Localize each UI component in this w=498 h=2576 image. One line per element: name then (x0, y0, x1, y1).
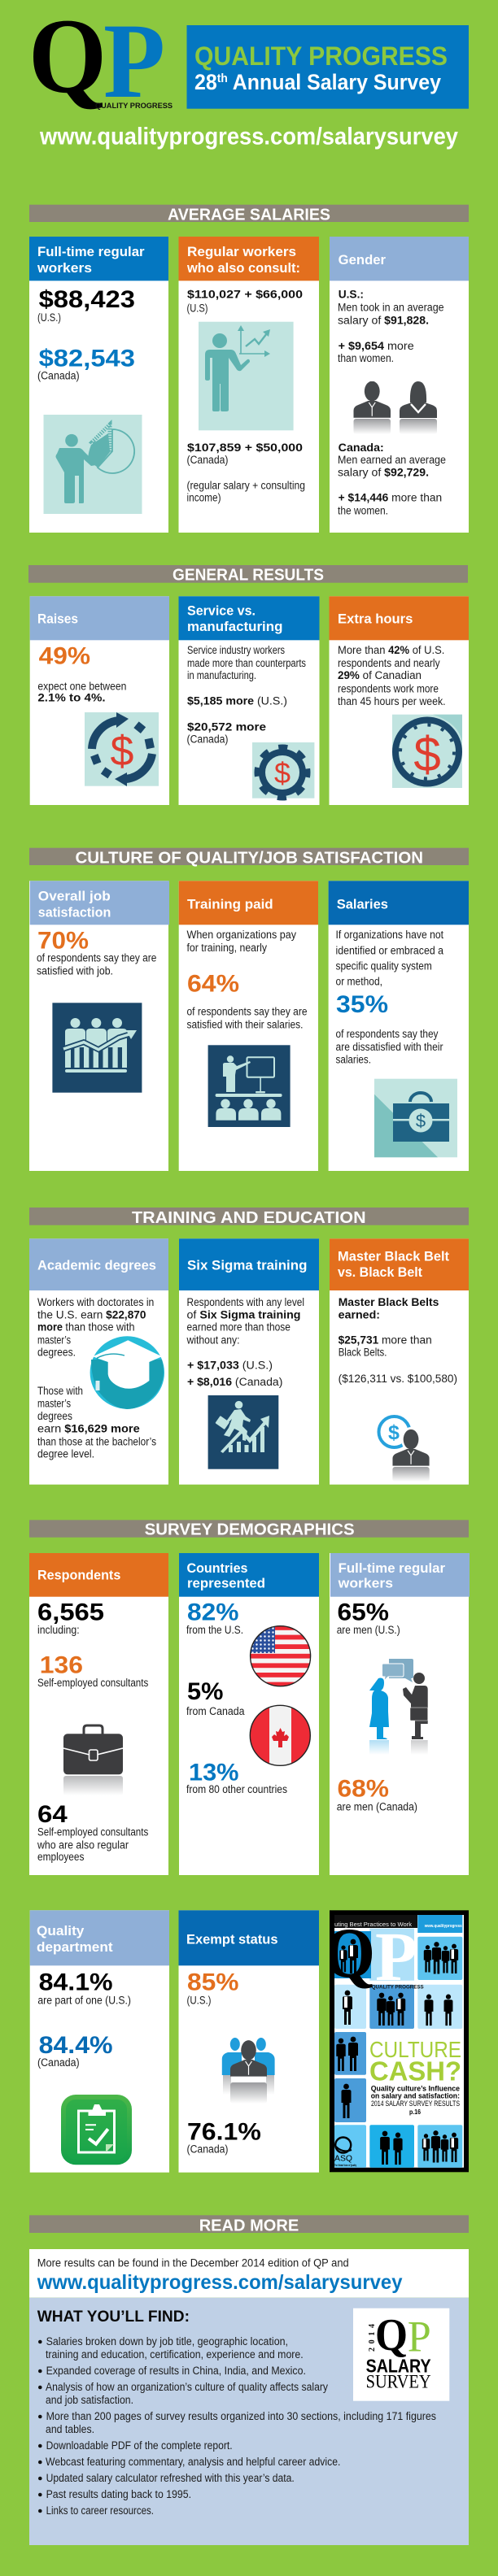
panel: gender: Men earned an average (338, 454, 446, 466)
panel: academic degrees: more than those with (37, 1321, 135, 1334)
logo: 2014 QP salary survey: 2014 (368, 2324, 377, 2352)
panel: gender: U.S.: (339, 288, 364, 301)
icon: dollar in gear (252, 742, 314, 798)
icon: man with dollar coin: $ (388, 1421, 400, 1444)
panel: countries represented: Countries (187, 1561, 247, 1576)
icon: briefcase (63, 1725, 123, 1795)
panel: full-time regular workers demographics: 68% (337, 1775, 389, 1802)
panel: gender: Gender (339, 253, 387, 268)
panel: full-time regular workers demographics: workers (338, 1577, 393, 1591)
panel: academic degrees (29, 1238, 168, 1485)
panel: overall job satisfaction: satisfaction (38, 905, 111, 920)
panel: master black belt vs black belt: Black Belts. (339, 1346, 387, 1358)
panel: gender (330, 237, 469, 533)
icon: dollar in gear: $ (274, 756, 290, 790)
bullet list: Webcast featuring commentary, analysis and helpful career advice. (46, 2456, 340, 2468)
panel: salaries: If organizations have not (335, 929, 443, 941)
panel: countries represented: represented (187, 1577, 265, 1591)
icon: two people talking (369, 1659, 428, 1755)
panel: exempt status: (U.S.) (187, 1994, 212, 2006)
panel: overall job satisfaction: Overall job (38, 889, 111, 903)
heading: training and education (29, 1208, 469, 1227)
panel: countries represented: 13% (189, 1759, 239, 1786)
panel: six sigma training: + $8,016 (Canada) (187, 1376, 282, 1388)
panel: extra hours: respondents and nearly (338, 657, 440, 669)
title box: Annual Salary Survey (228, 70, 441, 94)
panel: gender: salary of $92,729. (338, 467, 429, 479)
panel: master black belt vs black belt: Master Black Belt (338, 1250, 449, 1264)
icon: dollar in cycle arrows (85, 712, 159, 786)
panel: service vs manufacturing: Service vs. (187, 604, 256, 619)
panel: academic degrees: Those with (37, 1385, 83, 1397)
panel: gender: + $14,446 more than (339, 492, 442, 504)
icon: money briefcase: $ (416, 1111, 426, 1131)
panel: gender: the women. (338, 505, 388, 517)
logo: QP Quality Progress: P (103, 1, 165, 120)
logo: 2014 QP salary survey: P (408, 2313, 431, 2361)
panel: raises: expect one between (37, 680, 126, 692)
panel: full-time regular workers: $82,543 (39, 346, 135, 372)
icon: dollar in cycle arrows: $ (111, 728, 134, 775)
bullet list: More than 200 pages of survey results organized into 30 sections, including 171 figures (46, 2410, 436, 2422)
panel: respondents: Respondents (37, 1569, 120, 1583)
panel: overall job satisfaction (29, 881, 169, 1171)
heading: read more: READ MORE (199, 2216, 299, 2234)
panel: quality department: (Canada) (37, 2056, 80, 2069)
icon: dollar clock (392, 715, 462, 788)
panel: salaries: salaries. (335, 1053, 371, 1065)
panel: gender: + $9,654 more (339, 340, 414, 352)
panel: quality department: are part of one (U.S.) (37, 1994, 131, 2006)
panel: salaries: of respondents say they (335, 1028, 439, 1040)
panel: quality department: department (37, 1940, 113, 1955)
panel: raises: 49% (39, 643, 90, 670)
panel: gender: Men took in an average (338, 302, 444, 314)
panel: master black belt vs black belt: earned: (339, 1308, 380, 1321)
heading: read more (29, 2215, 469, 2234)
panel: master black belt vs black belt: $25,731 more than (339, 1334, 432, 1347)
heading: general results (28, 565, 468, 584)
logo: 2014 QP salary survey (353, 2308, 449, 2401)
logo: 2014 QP salary survey: SALARY (366, 2355, 431, 2376)
cover: QP masthead: P (375, 1917, 417, 1995)
panel: extra hours: More than 42% of U.S. (338, 644, 444, 656)
panel: full-time regular workers demographics: 65% (337, 1599, 389, 1626)
icon: man and woman (353, 381, 437, 434)
panel: regular workers who also consult: (U.S) (187, 302, 208, 314)
panel: salaries (329, 881, 469, 1171)
cover: headline: p.16 (409, 2108, 421, 2116)
cover: silhouettes (336, 1939, 458, 2165)
icon: man climbing chart (208, 1395, 278, 1469)
panel: respondents: employees (37, 1851, 85, 1863)
panel: exempt status: 85% (187, 1969, 239, 1996)
bullet list (38, 2335, 436, 2517)
icon: group of people (222, 2034, 275, 2104)
panel: extra hours (329, 596, 469, 805)
panel: exempt status: Exempt status (186, 1933, 278, 1947)
panel: quality department: 84.1% (39, 1969, 113, 1996)
panel: raises (30, 596, 169, 805)
panel: academic degrees: Workers with doctorates in (37, 1296, 154, 1308)
icon: presenter with pie chart (44, 415, 142, 514)
panel: gender: than women. (338, 352, 394, 364)
panel: respondents: 136 (40, 1651, 83, 1678)
panel: more results link (29, 2249, 469, 2298)
magazine cover (324, 1910, 469, 2172)
bullet list: Salaries broken down by job title, geographic location, (46, 2335, 288, 2348)
panel: six sigma training: without any: (186, 1334, 239, 1347)
panel: full-time regular workers demographics (330, 1553, 470, 1875)
cover: top strip: uting Best Practices to Work (334, 1921, 412, 1928)
panel: extra hours: than 45 hours per week. (338, 695, 446, 707)
panel: training paid (179, 881, 318, 1171)
cover: QP masthead: QUALITY PROGRESS (372, 1985, 424, 1991)
panel: full-time regular workers demographics: Full-time regular (339, 1561, 446, 1576)
panel: regular workers who also consult: income) (187, 492, 221, 504)
panel: regular workers who also consult: $107,859 + $50,000 (187, 441, 303, 454)
panel: respondents: 6,565 (37, 1599, 104, 1626)
panel: six sigma training: earned more than those (187, 1321, 290, 1334)
panel: service vs manufacturing: Service industry workers (187, 644, 285, 656)
cover: headline: on salary and satisfaction: (371, 2092, 460, 2101)
panel: six sigma training: + $17,033 (U.S.) (187, 1359, 273, 1371)
cover: ASQ logo (334, 2137, 356, 2167)
panel: countries represented: from Canada (186, 1705, 245, 1717)
cover: headline: Quality culture’s Influence (371, 2085, 460, 2094)
panel: extra hours: Extra hours (338, 612, 413, 627)
panel: overall job satisfaction: of respondents say they are (37, 951, 156, 964)
panel: service vs manufacturing: $20,572 more (187, 720, 266, 733)
cover: top strip (334, 1915, 462, 1933)
panel: salaries: or method, (335, 976, 382, 988)
panel: six sigma training: Six Sigma training (187, 1259, 307, 1273)
panel: full-time regular workers demographics: are men (Canada) (337, 1801, 417, 1813)
bullet list: and tables. (46, 2423, 94, 2435)
cover: ASQ logo: ASQ (334, 2155, 352, 2164)
panel: six sigma training: Respondents with any level (187, 1296, 304, 1308)
panel: quality department: 84.4% (39, 2032, 113, 2059)
heading: survey demographics (29, 1520, 469, 1538)
panel: extra hours: 29% of Canadian (338, 669, 422, 681)
panel: training paid: satisfied with their salaries. (187, 1018, 303, 1030)
panel: regular workers who also consult: $110,027 + $66,000 (187, 288, 303, 301)
bullet list: and job satisfaction. (46, 2394, 133, 2406)
panel: overall job satisfaction: 70% (37, 928, 89, 955)
panel: academic degrees: earn $16,629 more (37, 1423, 140, 1435)
panel: quality department (30, 1910, 169, 2173)
panel: salaries: identified or embraced a (335, 944, 443, 956)
cover: headline: CULTURE (369, 2037, 461, 2062)
heading: training and education: TRAINING AND EDUCATION (132, 1208, 366, 1227)
logo: 2014 QP salary survey: Q (375, 2310, 408, 2361)
panel: salaries: specific quality system (335, 959, 432, 972)
panel: gender: salary of $91,828. (338, 315, 429, 327)
panel: respondents: Self-employed consultants (37, 1825, 149, 1838)
panel: training paid: of respondents say they are (187, 1005, 308, 1017)
panel: academic degrees: degrees. (37, 1346, 76, 1358)
panel: what you'll find: WHAT YOU’LL FIND: (37, 2308, 190, 2326)
panel: full-time regular workers: $88,423 (39, 286, 135, 313)
icon: team with rising arrow (52, 1003, 142, 1093)
panel: academic degrees: the U.S. earn $22,870 (37, 1309, 146, 1321)
panel: salaries: are dissatisfied with their (335, 1041, 443, 1053)
cover: headline (369, 2037, 461, 2116)
panel: respondents (29, 1553, 168, 1875)
panel: full-time regular workers demographics: are men (U.S.) (337, 1624, 400, 1636)
icon: Canadian flag (250, 1704, 312, 1766)
icon: US flag (250, 1625, 312, 1687)
panel: master black belt vs black belt: ($126,311 vs. $100,580) (339, 1373, 457, 1385)
title box: th (217, 72, 228, 85)
panel: academic degrees: master’s (37, 1334, 71, 1347)
panel: respondents: 64 (37, 1801, 68, 1828)
panel: regular workers who also consult: Regular workers (187, 245, 296, 259)
panel: salaries: Salaries (337, 897, 388, 912)
panel: service vs manufacturing (179, 596, 319, 805)
logo: QP Quality Progress: QUALITY PROGRESS (95, 102, 173, 111)
panel: countries represented: 5% (187, 1678, 223, 1705)
panel: raises: Raises (37, 612, 78, 627)
panel: gender: Canada: (339, 441, 384, 454)
website url: www.qualityprogress.com/salarysurvey (39, 124, 458, 150)
cover: ASQ logo: The Global Voice of Quality (334, 2164, 356, 2167)
heading: survey demographics: SURVEY DEMOGRAPHICS (145, 1520, 355, 1538)
title box (187, 25, 469, 109)
panel: overall job satisfaction: satisfied with job. (37, 964, 113, 977)
panel: service vs manufacturing: in manufacturing. (187, 669, 256, 681)
icon: man with dollar coin (379, 1416, 430, 1482)
bullet list: Updated salary calculator refreshed with this year’s data. (46, 2472, 295, 2484)
panel: exempt status: (Canada) (187, 2143, 228, 2155)
panel: academic degrees: master’s (37, 1398, 71, 1410)
panel: service vs manufacturing: $5,185 more (U.S.) (187, 695, 287, 707)
icon: classroom presenter (208, 1045, 290, 1127)
cover: headline: CASH? (369, 2056, 461, 2086)
icon: green clipboard (61, 2095, 132, 2165)
panel: academic degrees: Academic degrees (37, 1259, 156, 1273)
panel: regular workers who also consult (179, 237, 319, 533)
panel: service vs manufacturing: (Canada) (187, 733, 228, 745)
panel: extra hours: respondents work more (338, 682, 439, 694)
panel: training paid: Training paid (187, 897, 273, 912)
icon: dollar clock: $ (413, 727, 441, 781)
panel: training paid: 64% (187, 970, 239, 997)
panel: regular workers who also consult: (Canada) (187, 454, 228, 466)
cover: QP masthead (334, 1930, 423, 1990)
cover: QP masthead: Q (324, 1914, 375, 1993)
panel: six sigma training: of Six Sigma training (187, 1309, 301, 1321)
title box: 28 (194, 70, 219, 94)
icon: presenter with growth chart (199, 322, 294, 430)
panel: full-time regular workers: workers (37, 261, 92, 276)
panel: respondents: including: (37, 1624, 80, 1636)
panel: countries represented (179, 1553, 319, 1875)
panel: full-time regular workers: (Canada) (37, 370, 80, 382)
icon: graduation cap (90, 1336, 164, 1409)
logo: QP Quality Progress (28, 0, 173, 120)
heading: average salaries: AVERAGE SALARIES (168, 206, 330, 224)
bullet list: Downloadable PDF of the complete report. (46, 2439, 233, 2452)
panel: service vs manufacturing: made more than counterparts (187, 657, 306, 669)
panel: service vs manufacturing: manufacturing (187, 620, 282, 634)
panel: academic degrees: degree level. (37, 1448, 94, 1460)
panel: countries represented: from the U.S. (186, 1624, 243, 1636)
panel: countries represented: 82% (187, 1599, 239, 1626)
cover: top strip: www.qualityprogress (424, 1924, 462, 1929)
cover: photo tiles (334, 1929, 462, 2168)
panel: master black belt vs black belt: Master Black Belts (339, 1295, 439, 1308)
panel: quality department: Quality (37, 1924, 85, 1939)
panel: exempt status (179, 1910, 319, 2173)
bullet list: Expanded coverage of results in China, India, and Mexico. (46, 2365, 306, 2377)
panel: master black belt vs black belt (330, 1238, 469, 1485)
heading: culture of quality: CULTURE OF QUALITY/JOB SATISFACTION (75, 849, 423, 868)
panel: respondents: Self-employed consultants (37, 1677, 149, 1689)
panel: salaries: 35% (336, 991, 388, 1018)
panel: full-time regular workers: (U.S.) (37, 311, 61, 324)
title box: QUALITY PROGRESS (194, 41, 448, 71)
panel: full-time regular workers (29, 237, 168, 533)
panel: exempt status: 76.1% (187, 2119, 261, 2146)
panel: six sigma training (179, 1238, 319, 1485)
panel: more results link: More results can be found in the December 2014 edition of QP and (37, 2257, 349, 2269)
panel: what you'll find (29, 2298, 469, 2545)
panel: respondents: who are also regular (37, 1838, 129, 1851)
logo: 2014 QP salary survey: SURVEY (366, 2372, 431, 2392)
bullet list: Analysis of how an organization’s culture of quality affects salary (46, 2381, 328, 2393)
panel: academic degrees: than those at the bachelor’s (37, 1435, 156, 1447)
panel: regular workers who also consult: who also consult: (186, 261, 300, 276)
heading: general results: GENERAL RESULTS (173, 565, 324, 584)
bullet list: Links to career resources. (46, 2504, 154, 2517)
panel: countries represented: from 80 other countries (186, 1783, 287, 1795)
panel: master black belt vs black belt: vs. Black Belt (338, 1265, 422, 1280)
panel: training paid: When organizations pay (187, 929, 296, 941)
panel: more results link: www.qualityprogress.com/salarysurvey (37, 2271, 403, 2294)
panel: raises: 2.1% to 4%. (37, 691, 106, 704)
heading: average salaries (29, 205, 469, 224)
panel: full-time regular workers: Full-time regular (37, 245, 145, 259)
panel: training paid: for training, nearly (187, 942, 267, 954)
bullet list: training and education, certification, experience and more. (46, 2348, 304, 2361)
bullet list: Past results dating back to 1995. (46, 2488, 191, 2500)
panel: academic degrees: degrees (37, 1410, 72, 1422)
icon: money briefcase (374, 1079, 457, 1157)
panel: regular workers who also consult: (regular salary + consulting (187, 480, 305, 492)
cover: headline: 2014 SALARY SURVEY RESULTS (371, 2100, 460, 2108)
